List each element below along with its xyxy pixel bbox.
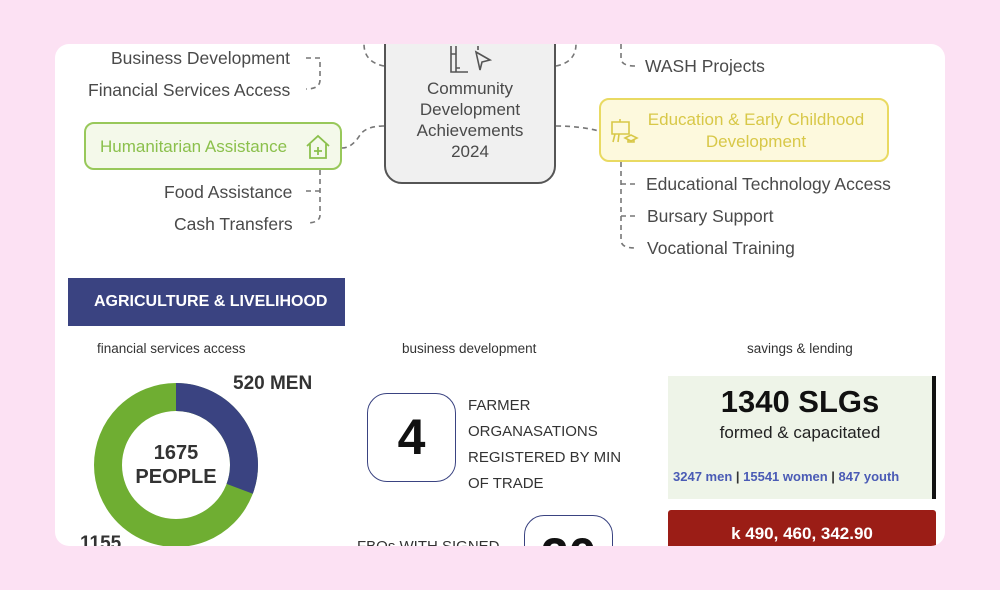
panel: savings amount [668,510,936,560]
card [55,44,945,546]
panel: humanitarian assistance [84,122,342,170]
card: Cash Transfers [174,214,293,234]
stat: 4 farmer organisations: FARMER [468,397,531,414]
card: Vocational Training [647,238,795,258]
card: business development [402,341,536,356]
stat: FBOs with signed [357,515,613,546]
stat: 4 farmer organisations [367,393,621,492]
panel: humanitarian assistance: Humanitarian Assistance [100,137,287,156]
heading: agriculture & livelihood [68,278,345,326]
stat: 4 farmer organisations: REGISTERED BY MIN [468,449,621,466]
panel: education [599,98,889,162]
panel: savings amount: k 490, 460, 342.90 [731,524,873,543]
panel: SLGs [668,376,936,499]
center box: Achievements [417,121,523,140]
panel: SLGs: 3247 men | 15541 women | 847 youth [673,469,899,484]
icon: device pointer [450,46,492,73]
heading: agriculture & livelihood: AGRICULTURE & LIVELIHOOD [94,293,327,310]
icon: house plus [306,134,330,159]
donut chart: PEOPLE [135,466,217,488]
donut chart [80,373,312,546]
center box: Development [420,100,520,119]
card: savings & lending [747,341,853,356]
education items: Educational Technology Access [646,174,891,194]
stat: 4 farmer organisations: ORGANASATIONS [468,423,598,440]
center box: 2024 [451,142,489,161]
card: Financial Services Access [88,80,290,100]
panel: education: Education & Early Childhood [648,110,864,129]
donut chart: 520 MEN [233,373,312,394]
panel: education: Development [706,132,806,151]
icon: education board [611,119,639,143]
left items: agriculture branch: Business Development [111,48,290,68]
stat: 4 farmer organisations: 4 [398,409,425,465]
card: Bursary Support [647,206,773,226]
panel: SLGs: 1340 SLGs [721,384,879,419]
center box [384,24,556,184]
humanitarian items: Food Assistance [164,182,292,202]
panel: SLGs: formed & capacitated [720,423,880,442]
subheadings: financial services access [97,341,246,356]
connectors [306,44,635,249]
stat: 4 farmer organisations: OF TRADE [468,475,544,492]
WASH item: WASH Projects [645,56,765,76]
donut chart: 1675 [154,442,198,464]
center box: Community [427,79,513,98]
